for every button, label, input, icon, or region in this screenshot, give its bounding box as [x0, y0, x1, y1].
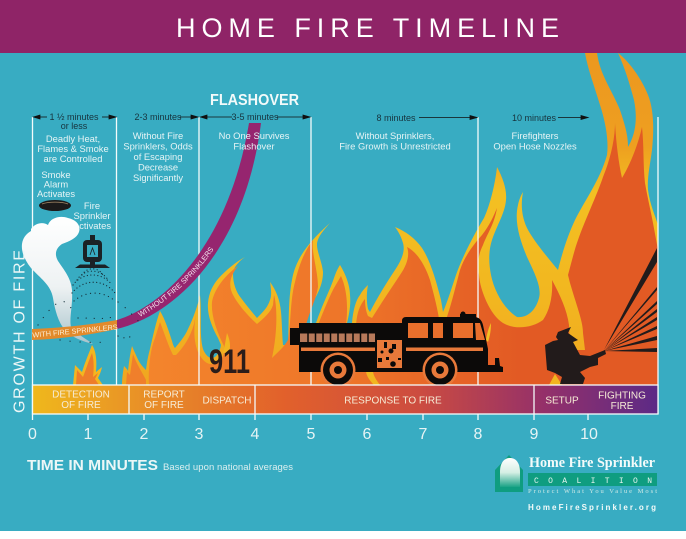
bar label: report: OF FIRE	[144, 400, 184, 411]
vertical time gridlines	[32, 117, 658, 420]
logo: Home Fire Sprinkler Coalition: Home Fire Sprinkler	[529, 455, 655, 471]
bar label: dispatch: DISPATCH	[202, 396, 252, 406]
text: report column	[123, 130, 193, 183]
ladder	[300, 332, 375, 342]
logo: Home Fire Sprinkler Coalition	[495, 455, 657, 512]
bar label: detection	[52, 390, 110, 411]
axis numbers: 9	[530, 426, 539, 443]
911: 911	[209, 343, 250, 381]
text: firefighting column	[493, 130, 577, 152]
title: HOME FIRE TIMELINE	[176, 13, 559, 43]
stripe	[301, 348, 483, 351]
y axis label: GROWTH OF FIRE	[12, 250, 28, 413]
small flame 1	[73, 345, 103, 385]
duration labels and arrows: 10 minutes	[512, 113, 557, 123]
bar label: report	[143, 390, 185, 411]
bar label: report: REPORT	[143, 390, 185, 400]
small yellow spike near 911	[223, 333, 230, 353]
axis numbers: 6	[363, 426, 372, 443]
flashover heading: FLASHOVER	[210, 92, 299, 109]
water spray	[604, 248, 657, 352]
flames	[73, 53, 658, 385]
text: detection column: Activates	[73, 220, 111, 231]
text: response column: Without Sprinklers,	[356, 130, 434, 141]
axis numbers: 10	[580, 426, 598, 443]
header band	[0, 0, 686, 53]
pump panel	[377, 340, 402, 368]
text: report column: Sprinklers, Odds	[123, 140, 193, 152]
rear wheel	[320, 352, 356, 388]
text: detection column: Sprinkler	[74, 210, 110, 221]
bar label: setup: SETUP	[545, 396, 579, 406]
text: detection column: Alarm	[44, 178, 68, 190]
x axis label: TIME IN MINUTES	[27, 457, 158, 474]
axis numbers	[28, 426, 598, 443]
bar label: detection: OF FIRE	[61, 400, 101, 411]
yellow tail at firefighter knee	[549, 374, 562, 385]
x axis label: Based upon national averages	[163, 462, 293, 473]
axis numbers: 8	[474, 426, 483, 443]
logo house icon	[495, 455, 523, 492]
logo: Home Fire Sprinkler Coalition: COALITION	[534, 477, 652, 486]
text: flashover column: Flashover	[233, 140, 275, 152]
text: detection column: Deadly Heat,	[46, 133, 100, 144]
text: report column: of Escaping	[134, 151, 182, 162]
axis numbers: 4	[251, 426, 260, 443]
text: detection column: Smoke	[41, 169, 71, 180]
duration labels and arrows: or less	[61, 121, 88, 131]
duration labels and arrows: 1 ½ minutes	[49, 112, 99, 122]
timeline bar	[32, 385, 658, 414]
icon: firefighter with hose	[545, 248, 657, 384]
bar label: response: RESPONSE TO FIRE	[344, 396, 442, 406]
text: report column: Without Fire	[133, 130, 183, 141]
text: detection column	[37, 133, 111, 231]
icon: fire engine	[290, 312, 503, 388]
axis numbers: 1	[84, 426, 93, 443]
axis numbers: 5	[307, 426, 316, 443]
windows	[408, 323, 485, 340]
curve: without fire sprinklers: WITHOUT FIRE SPRINKLERS	[138, 247, 213, 316]
text: firefighting column: Firefighters	[512, 130, 559, 141]
duration labels and arrows	[34, 112, 588, 131]
text: response column	[339, 130, 451, 152]
front wheel	[422, 352, 458, 388]
curve: with fire sprinklers: WITH FIRE SPRINKLERS	[32, 322, 118, 340]
text: detection column: Fire	[84, 200, 100, 211]
yellow swirl under truck	[366, 372, 380, 385]
curve: without fire sprinklers	[117, 123, 261, 329]
duration labels and arrows: 8 minutes	[376, 113, 416, 123]
text: report column: Decrease	[138, 162, 178, 172]
text: response column: Fire Growth is Unrestricted	[339, 140, 451, 152]
small yellow tongue by cab	[486, 323, 491, 342]
main fire outline	[122, 53, 658, 385]
axis numbers: 7	[419, 426, 428, 443]
sprinkler water droplets	[38, 269, 145, 342]
duration labels and arrows: 3-5 minutes	[231, 112, 279, 122]
bar label: fighting	[598, 390, 646, 412]
axis numbers: 2	[140, 426, 149, 443]
text: detection column: are Controlled	[44, 153, 102, 164]
logo: Home Fire Sprinkler Coalition: HomeFireSprinkler.org	[528, 503, 656, 512]
bar label: fighting: FIRE	[611, 401, 634, 412]
axis numbers: 3	[195, 426, 204, 443]
bar label: fighting: FIGHTING	[598, 390, 646, 402]
logo: Home Fire Sprinkler Coalition: Protect What You Value Most	[528, 488, 657, 495]
duration labels and arrows: 2-3 minutes	[134, 112, 182, 122]
x axis label	[27, 457, 293, 474]
text: flashover column: No One Survives	[219, 130, 290, 141]
icon: fire sprinkler	[75, 235, 110, 268]
text: firefighting column: Open Hose Nozzles	[493, 140, 577, 152]
text: detection column: Flames & Smoke	[37, 143, 109, 154]
axis ticks	[88, 414, 588, 420]
bar label: detection: DETECTION	[52, 390, 110, 400]
icon: smoke alarm	[39, 200, 71, 211]
inner flame left	[126, 354, 146, 385]
icon: smoke plume	[22, 217, 93, 344]
inner fire	[149, 123, 658, 385]
text: flashover column	[219, 130, 290, 152]
axis numbers: 0	[28, 426, 37, 443]
text: report column: Significantly	[133, 172, 183, 183]
text: detection column: Activates	[37, 188, 75, 199]
